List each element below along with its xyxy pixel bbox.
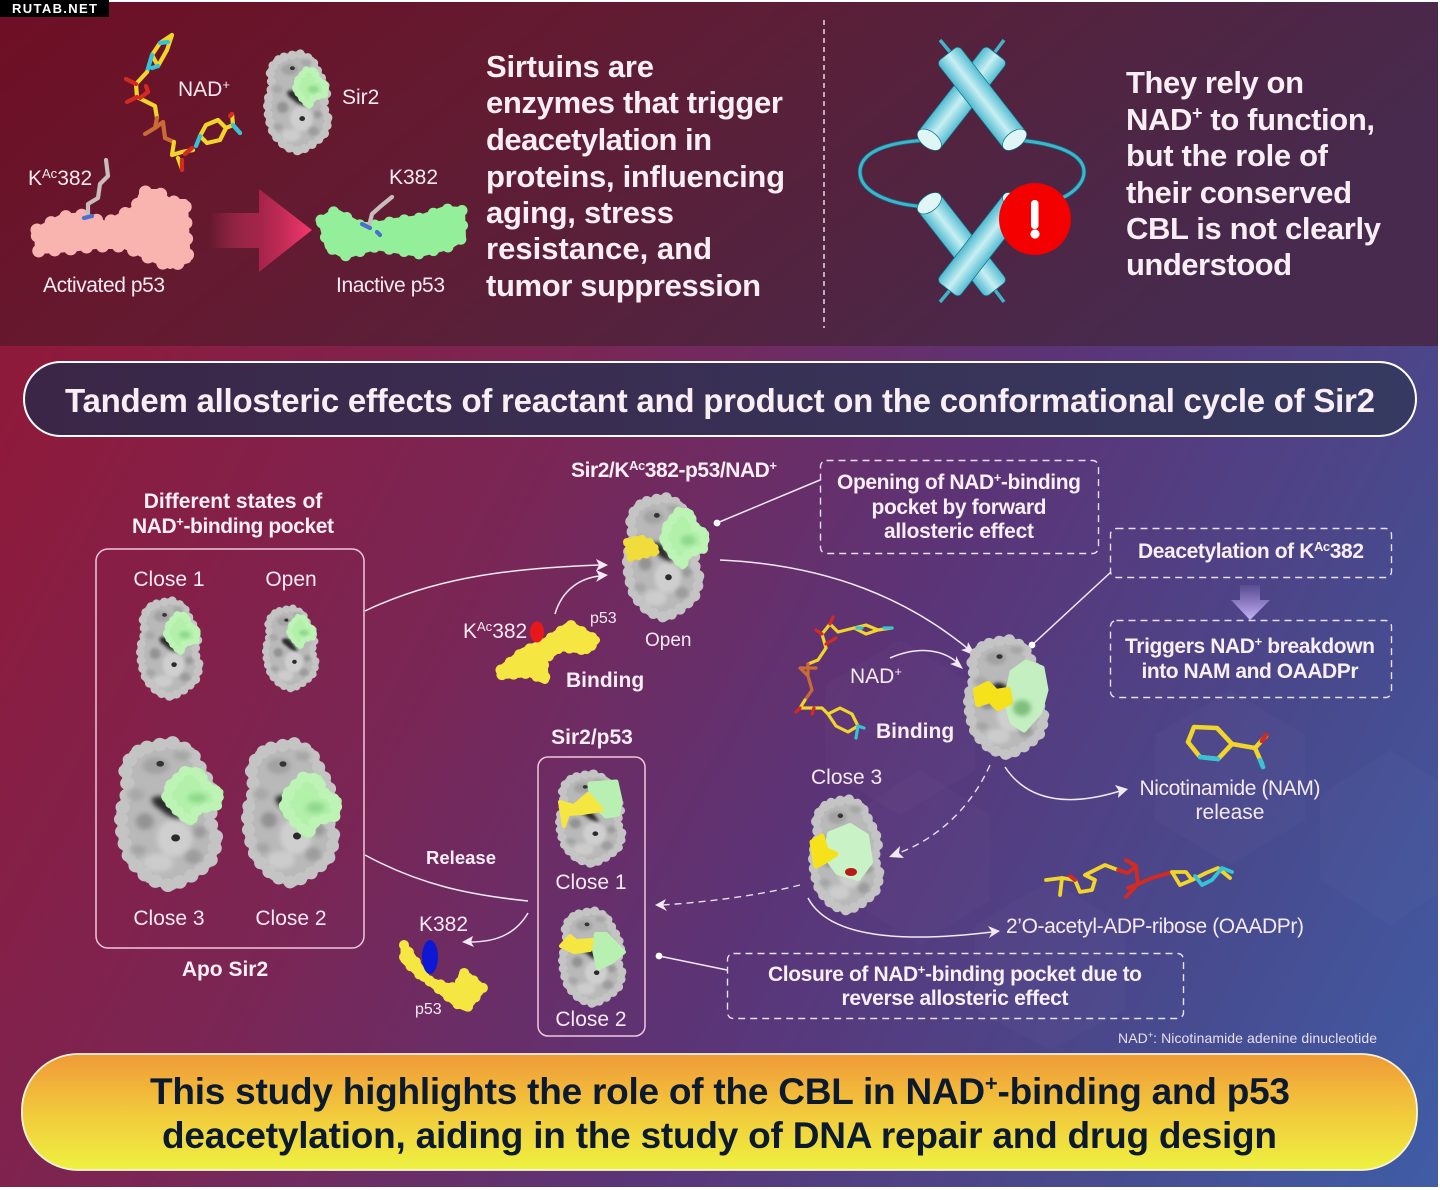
heading: Sir2/KAc382-p53/NAD+: Ac (629, 458, 645, 473)
molecule: OAADPr (1046, 860, 1232, 897)
callout: deacetylation: Ac (1314, 539, 1330, 554)
label: binding: Binding (566, 669, 644, 692)
label: Sir2: Sir2 (342, 86, 379, 109)
label: NAD+: + (222, 77, 230, 92)
title banner (24, 362, 1416, 436)
protein: open with p53 (627, 497, 705, 618)
label: activated p53: Activated p53 (43, 274, 165, 297)
heading: Sir2/KAc382-p53/NAD+: + (769, 458, 777, 473)
top panel background (0, 0, 1440, 346)
callout: NAD breakdown: Triggers NAD (1125, 635, 1255, 658)
text block: sirtuins description: aging, stress (486, 195, 674, 230)
callout: opening of pocket: Opening of NAD (837, 471, 994, 494)
text block: NAD reliance: CBL is not clearly (1126, 211, 1382, 246)
label: inactive p53: Inactive p53 (336, 274, 445, 297)
footnote: + (1148, 1030, 1153, 1040)
watermark: RUTAB.NET: RUTAB.NET (12, 1, 97, 16)
text block: sirtuins description: resistance, and (486, 231, 712, 266)
callout: opening of pocket: pocket by forward (872, 496, 1046, 519)
molecule: NAD+ (126, 35, 240, 170)
panel: sirtuin reaction (28, 35, 463, 297)
label: KAc382: Ac (42, 166, 58, 181)
label: p53: p53 (415, 1001, 442, 1018)
heading: Sir2/KAc382-p53/NAD+: Sir2/K (571, 459, 629, 482)
label: nicotinamide: Nicotinamide (NAM) (1140, 777, 1320, 800)
protein: complex with NAD+ (968, 639, 1046, 755)
protein: close 3 with product (812, 799, 880, 911)
protein: close 1 with p53 (559, 773, 623, 864)
label: close 3: Close 3 (133, 907, 205, 930)
text block: NAD reliance: but the role of (1126, 138, 1329, 173)
callout: deacetylation: Deacetylation of K (1138, 540, 1314, 563)
arrow: down (1231, 585, 1270, 620)
conclusion banner (22, 1054, 1417, 1170)
text block: NAD reliance: their conserved (1126, 175, 1352, 210)
callout: closure of pocket (728, 954, 1184, 1018)
conclusion banner: + (985, 1071, 998, 1096)
text block: NAD reliance: NAD (1126, 102, 1192, 137)
label: K382: K382 (389, 166, 438, 189)
heading: different states (132, 490, 334, 538)
label: close 2: Close 2 (555, 1008, 627, 1031)
heading: different states: Different states of (144, 490, 323, 513)
text block: NAD reliance: They rely on (1126, 65, 1304, 100)
text block: NAD reliance: to function, (1202, 102, 1375, 137)
callout: opening of pocket: allosteric effect (884, 520, 1034, 543)
label: KAc382: 382 (57, 167, 92, 190)
molecule: acetylated p53 (501, 622, 596, 680)
label: NAD+: NAD (178, 78, 222, 101)
protein: close 2 (247, 743, 337, 883)
label: release: Release (426, 847, 496, 868)
heading: different states: -binding pocket (183, 515, 334, 538)
label: KAc382: Ac (477, 619, 493, 634)
text block: sirtuins description: deacetylation in (486, 122, 712, 157)
conclusion banner: This study highlights the role of the CBL in NAD (150, 1071, 985, 1112)
callout: deacetylation (1110, 528, 1392, 578)
conclusion banner: -binding and p53 (998, 1071, 1290, 1112)
callout: opening of pocket (820, 460, 1098, 554)
label: close 1: Close 1 (133, 568, 205, 591)
text block: sirtuins description: Sirtuins are (486, 49, 654, 84)
panel: apo Sir2 states (96, 549, 364, 948)
arrow: deacetylation (210, 189, 312, 272)
protein: close 2 with p53 (561, 910, 624, 1004)
callout: closure of pocket: Closure of NAD (768, 963, 918, 986)
label: KAc382: K (28, 167, 42, 190)
protein: open (265, 608, 317, 689)
protein: close 3 (121, 742, 219, 886)
callout: closure of pocket: + (918, 962, 926, 977)
molecule: nicotinamide (1188, 727, 1266, 767)
watermark: RUTAB.NET (0, 0, 109, 17)
callout: opening of pocket: -binding (1001, 471, 1081, 494)
callout: closure of pocket: reverse allosteric effect (842, 987, 1068, 1010)
label: KAc382: K (463, 620, 477, 643)
label: KAc382: 382 (492, 620, 527, 643)
conclusion banner: deacetylation, aiding in the study of DNA repair and drug design (162, 1115, 1277, 1156)
label: K382: K382 (419, 913, 468, 936)
label: close 2: Close 2 (255, 907, 327, 930)
callout: closure of pocket: -binding pocket due to (925, 963, 1142, 986)
label: open: Open (265, 568, 317, 591)
label: NAD+: NAD (850, 665, 894, 688)
text block: NAD reliance: understood (1126, 247, 1292, 282)
text block: sirtuins description (486, 49, 785, 303)
text block: sirtuins description: enzymes that trigger (486, 85, 783, 120)
protein: inactive p53 (321, 197, 463, 256)
panel: Sir2/p53 states (538, 757, 645, 1036)
icon: CBL helices with alert (860, 40, 1084, 302)
label: open: Open (645, 630, 691, 651)
callout: NAD breakdown: into NAM and OAADPr (1142, 660, 1358, 683)
label: p53: p53 (590, 610, 617, 627)
protein: Sir2 (267, 54, 329, 152)
callout: NAD breakdown: breakdown (1262, 635, 1375, 658)
molecule: deacetylated p53 (404, 940, 483, 1008)
callout: NAD breakdown: + (1255, 634, 1263, 649)
footnote: : Nicotinamide adenine dinucleotide (1153, 1030, 1377, 1046)
heading: different states: + (176, 514, 184, 529)
callout: deacetylation: 382 (1330, 540, 1364, 563)
text block: sirtuins description: tumor suppression (486, 268, 761, 303)
footnote: NAD (1118, 1030, 1148, 1046)
label: close 1: Close 1 (555, 871, 627, 894)
label: apo Sir2: Apo Sir2 (182, 958, 268, 981)
text block: NAD reliance: + (1192, 103, 1203, 123)
connector arrows (365, 559, 1128, 947)
protein: activated p53 (37, 160, 188, 266)
label: OAADPr: 2’O-acetyl-ADP-ribose (OAADPr) (1006, 915, 1304, 938)
label: Close 3: Close 3 (811, 766, 882, 789)
protein: close 1 (140, 600, 200, 697)
heading: Sir2/KAc382-p53/NAD+: 382-p53/NAD (645, 459, 770, 482)
text block: sirtuins description: proteins, influencing (486, 159, 785, 194)
label: binding: Binding (876, 720, 954, 743)
heading: Sir2/p53: Sir2/p53 (551, 726, 633, 749)
main panel background (0, 346, 1440, 1190)
text block: NAD reliance (1126, 65, 1382, 282)
callout: NAD breakdown (1110, 620, 1392, 698)
title banner: Tandem allosteric effects of reactant and product on the conformational cycle of Sir2 (65, 382, 1375, 419)
label: NAD+: + (894, 664, 902, 679)
label: nicotinamide (1140, 777, 1320, 824)
heading: different states: NAD (132, 515, 177, 538)
label: nicotinamide: release (1196, 801, 1264, 824)
molecule: NAD+ binding (796, 617, 892, 738)
callout: opening of pocket: + (994, 470, 1002, 485)
